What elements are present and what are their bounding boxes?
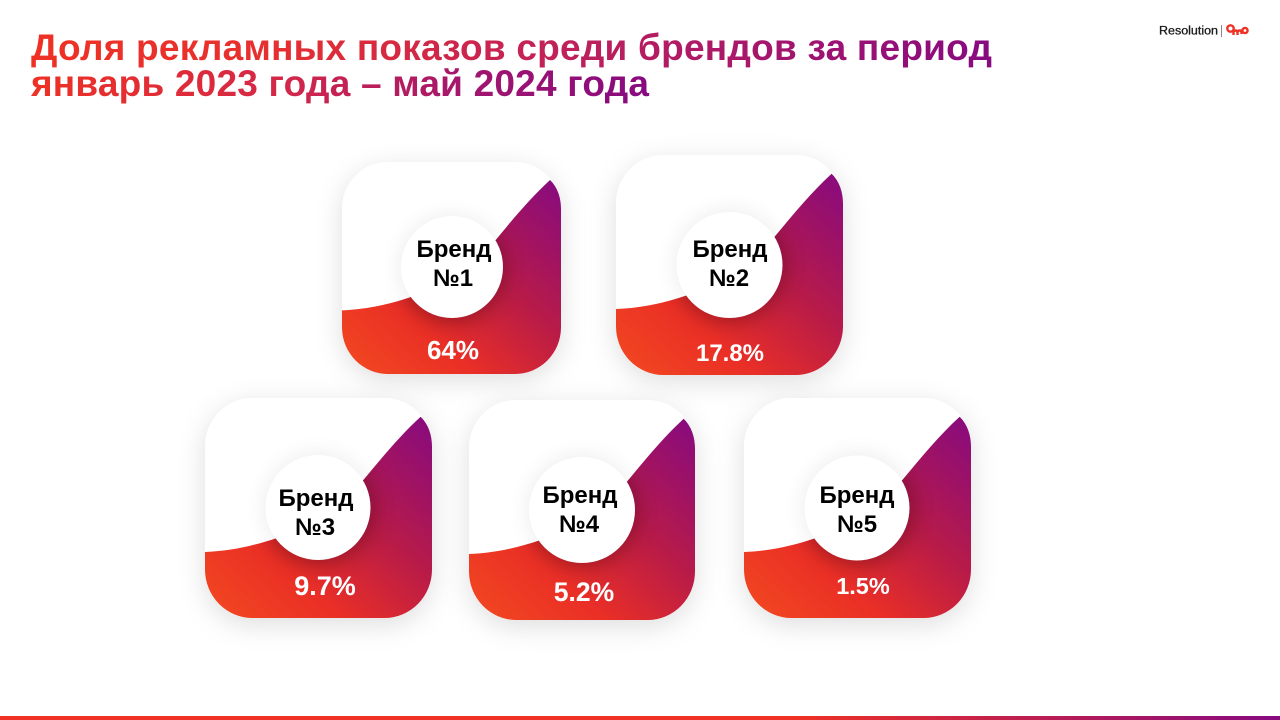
brand label: Бренд	[542, 482, 618, 509]
panel: Бренд №3	[205, 398, 432, 618]
brand label: Бренд	[416, 236, 492, 263]
brand label: №2	[709, 265, 749, 292]
logo: Resolution OMD: Resolution	[1159, 26, 1218, 38]
title: Доля рекламных показов среди брендов за период	[31, 27, 992, 68]
panel: Бренд №1	[342, 162, 561, 374]
brand circle	[266, 455, 370, 560]
panel: Бренд №2	[616, 155, 843, 375]
brand label: Бренд	[278, 485, 354, 512]
panel: Бренд №4	[469, 400, 695, 620]
share value: 17.8%	[696, 340, 764, 367]
brand label: №3	[295, 514, 335, 541]
logo: Resolution OMD	[1159, 25, 1248, 38]
card background	[744, 398, 971, 618]
brand label: Бренд	[692, 236, 768, 263]
share value: 1.5%	[836, 573, 890, 599]
share value: 9.7%	[294, 571, 356, 601]
brand circle	[401, 216, 503, 318]
brand circle	[804, 456, 910, 560]
brand label: №5	[837, 511, 877, 538]
brand label: №4	[559, 511, 600, 538]
share value: 5.2%	[554, 577, 614, 607]
card background	[469, 400, 695, 620]
brand circle	[529, 457, 635, 563]
brand label: Бренд	[820, 482, 894, 509]
bottom gradient bar	[0, 716, 1280, 720]
card background	[616, 155, 843, 375]
title: январь 2023 года – май 2024 года	[30, 63, 649, 104]
card background	[342, 162, 561, 374]
title	[30, 27, 992, 104]
card background	[205, 398, 432, 618]
brand label: №1	[433, 265, 473, 292]
brand circle	[676, 212, 782, 318]
panel: Бренд №5	[744, 398, 971, 618]
share value: 64%	[427, 335, 479, 365]
